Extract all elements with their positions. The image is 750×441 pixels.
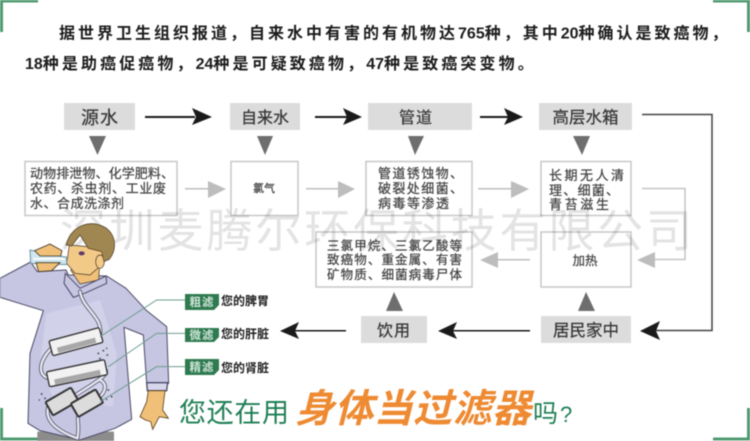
flow header: rooftop tank: 高层水箱	[552, 108, 618, 127]
lower hand	[140, 391, 168, 429]
neck	[71, 258, 100, 284]
gray connector from tank box to heating	[637, 188, 685, 268]
flow box: drinking: 饮用	[377, 322, 411, 340]
slogan: 吗?	[533, 400, 572, 428]
box: chlorine: 氯气	[253, 181, 275, 195]
box: source water pollutants: 农药、杀虫剂、工业废	[30, 181, 166, 196]
box: pipe contaminants: 病毒等渗透	[378, 196, 449, 211]
flow header: tap water	[230, 103, 300, 130]
ear	[96, 255, 104, 268]
up arrows	[386, 292, 595, 311]
gray arrow 1	[185, 181, 226, 198]
filter label: fine: 您的肾脏	[221, 360, 269, 375]
box: pipe contaminants	[366, 162, 472, 216]
flow header: source water: 源水	[81, 108, 119, 128]
box: byproducts	[316, 232, 472, 287]
box: byproducts: 矿物质、细菌病毒尸体	[327, 267, 462, 282]
box: heating	[541, 232, 631, 287]
slogan	[179, 388, 572, 431]
filter label: fine: 精滤	[190, 360, 214, 374]
black arrow 3	[480, 108, 523, 125]
black arrow 1	[145, 108, 212, 125]
box: byproducts: 致癌物、重金属、有害	[327, 252, 462, 267]
down arrows	[89, 136, 590, 155]
box: source water pollutants: 动物排泄物、化学肥料、	[30, 166, 174, 181]
face	[67, 245, 107, 275]
flow header: pipes: 管道	[399, 109, 433, 127]
box: tank contaminants: 长期无人清	[549, 168, 624, 183]
jacket	[0, 262, 169, 440]
filter label: micro	[185, 326, 269, 342]
flow header: tap water: 自来水	[241, 109, 289, 127]
cuff	[147, 383, 168, 391]
filter cartridge 2	[46, 360, 108, 387]
jacket highlight	[40, 300, 117, 407]
box: byproducts: 三氯甲烷、三氯乙酸等	[327, 238, 462, 253]
trousers	[37, 432, 114, 441]
illustration: person with filters	[0, 224, 185, 441]
bottle stripe	[33, 258, 65, 260]
black arrow drinking to person	[280, 322, 346, 339]
title: 据世界卫生组织报道，自来水中有害的有机物达765种，其中20种确认是致癌物，	[59, 24, 731, 42]
flow header: rooftop tank	[539, 103, 632, 130]
black arrow 2	[315, 108, 362, 125]
flow box: home	[541, 316, 631, 343]
filter label: coarse: 粗滤	[190, 295, 214, 309]
leader lines	[100, 300, 185, 402]
flow header: pipes	[368, 103, 472, 130]
box: pipe contaminants: 破裂处细菌、	[378, 181, 463, 196]
box: tank contaminants	[541, 162, 631, 216]
filter label: micro: 微滤	[190, 328, 214, 342]
filter cartridge 4	[71, 389, 103, 417]
tubes	[41, 292, 106, 438]
filter cartridge 1	[49, 328, 103, 356]
black arrow home to drinking	[438, 322, 530, 339]
filter cartridge 3	[45, 388, 78, 415]
filter label: fine	[185, 359, 269, 375]
gray arrow from heating to byproducts	[480, 252, 530, 268]
gray arrow 2	[306, 181, 355, 198]
box: tank contaminants: 理、细菌、	[549, 183, 619, 198]
collar	[64, 273, 107, 297]
drinking hand	[35, 244, 62, 272]
box: source water pollutants: 水、合成洗涤剂	[30, 196, 124, 211]
box: pipe contaminants: 管道锈蚀物、	[378, 166, 463, 181]
box: chlorine	[231, 162, 298, 216]
bottle	[30, 250, 67, 265]
box: source water pollutants	[25, 162, 177, 216]
filter label: coarse	[185, 293, 269, 310]
box: heating: 加热	[572, 254, 598, 268]
flow header: source water	[64, 103, 135, 130]
impurity specks	[38, 347, 113, 401]
box: tank contaminants: 青苔滋生	[549, 197, 609, 212]
title: 18种是助癌促癌物，24种是可疑致癌物，47种是致癌突变物。	[25, 54, 537, 73]
gray arrow 3	[478, 181, 529, 198]
filter label: coarse: 您的脾胃	[221, 293, 269, 308]
slogan: 身体当过滤器	[295, 388, 535, 431]
flow box: home: 居民家中	[553, 321, 619, 340]
watermark: 深圳麦腾尔环保科技有限公司	[60, 205, 692, 257]
flow box: drinking	[361, 316, 427, 343]
slogan: 您还在用	[179, 398, 289, 428]
filter label: micro: 您的肝脏	[221, 326, 269, 341]
hair	[66, 224, 115, 262]
eye	[79, 251, 85, 255]
title	[25, 24, 731, 73]
black connector from tank to home	[640, 114, 712, 340]
